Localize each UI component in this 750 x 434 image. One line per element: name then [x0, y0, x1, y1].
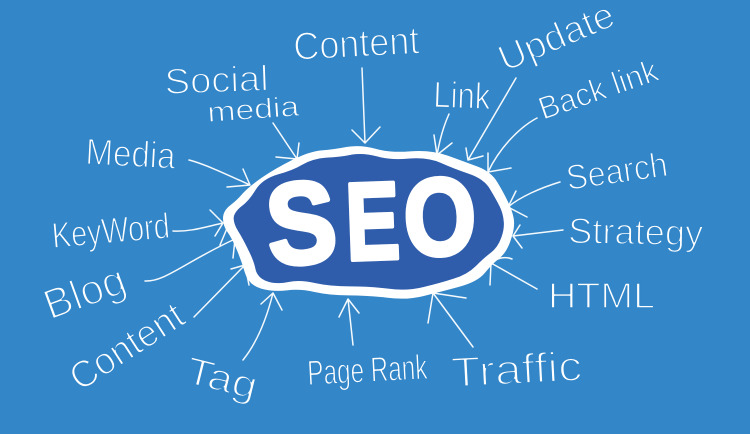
arrow: Traffic — [428, 293, 473, 347]
label: KeyWord: KeyWord — [50, 205, 171, 256]
arrow: Back link — [488, 118, 537, 172]
cloud: SEO centre — [225, 148, 512, 297]
arrow: Content lower — [194, 265, 249, 317]
arrow: HTML — [490, 258, 537, 289]
label: HTML: HTML — [548, 275, 655, 316]
arrow: Link — [434, 114, 452, 155]
label: Page Rank: Page Rank — [306, 348, 429, 393]
label: Traffic: Traffic — [450, 342, 583, 396]
label: Media: Media — [85, 131, 177, 177]
arrow: Blog — [145, 226, 235, 281]
arrow: Tag — [243, 293, 282, 360]
SEO heading: E — [344, 160, 402, 284]
arrow: KeyWord — [173, 210, 223, 236]
cloud outline — [225, 148, 512, 297]
arrow: Search — [508, 182, 560, 217]
label: Back link: Back link — [534, 52, 663, 127]
label: Strategy: Strategy — [568, 210, 704, 253]
label: Content lower: Content — [62, 294, 193, 400]
arrow: Update — [466, 78, 516, 160]
label: Social: Social — [164, 57, 269, 102]
cloud fill — [235, 155, 503, 288]
label: Content top: Content — [292, 19, 420, 69]
SEO heading: O — [402, 154, 478, 280]
arrow: Social media — [273, 123, 299, 159]
label: Search: Search — [564, 145, 670, 198]
arrow: Page Rank — [339, 299, 359, 345]
arrow: Content top — [352, 68, 380, 143]
arrow: Strategy — [513, 225, 563, 248]
SEO heading: S — [261, 156, 342, 291]
SEO heading — [261, 154, 478, 291]
label: Link: Link — [433, 74, 492, 117]
label: media: media — [206, 91, 301, 128]
label: Blog: Blog — [37, 256, 132, 328]
label: Tag: Tag — [182, 350, 262, 408]
arrow: Media — [189, 160, 250, 187]
